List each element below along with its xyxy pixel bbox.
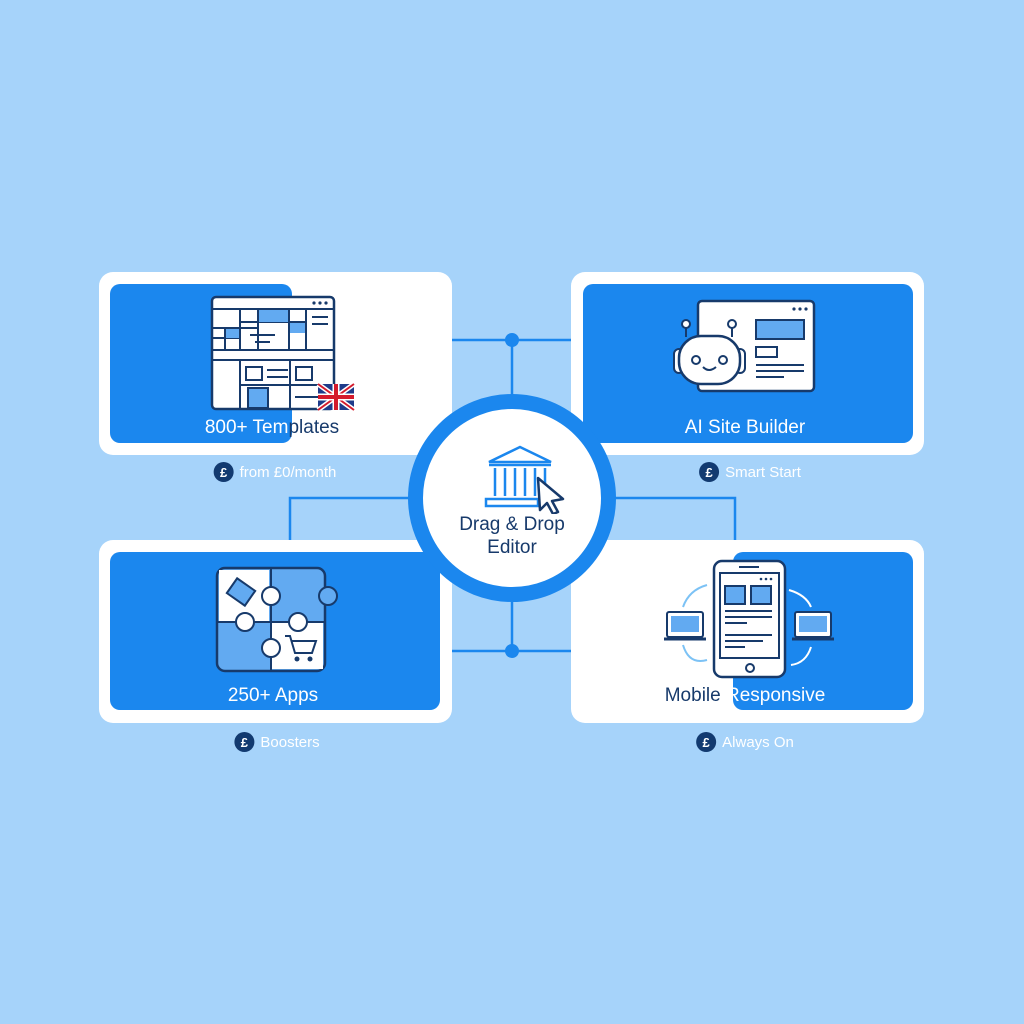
caption: Always On xyxy=(696,732,794,752)
label: 250+ Apps xyxy=(228,685,318,706)
label: Drag & Drop xyxy=(459,514,565,535)
caption: Smart Start: Smart Start xyxy=(725,464,801,480)
label: Editor xyxy=(487,537,537,558)
caption: Boosters xyxy=(234,732,320,752)
icon: building with cursor xyxy=(484,446,564,514)
caption: Boosters: Boosters xyxy=(260,734,320,750)
caption: Always On: £ xyxy=(703,734,710,750)
caption: Always On: Always On xyxy=(722,734,794,750)
icon: template layout xyxy=(210,296,354,411)
panel: 250+ Apps xyxy=(99,540,452,723)
caption: Boosters: £ xyxy=(241,734,248,750)
caption: from £0/month: from £0/month xyxy=(240,464,336,480)
label: 800+ Templates xyxy=(205,417,339,438)
label: AI Site Builder xyxy=(685,417,805,438)
caption: Smart Start xyxy=(699,462,801,482)
label xyxy=(459,514,565,558)
icon: UK flag xyxy=(318,384,354,410)
caption: Smart Start: £ xyxy=(705,464,713,480)
panel: AI Site Builder xyxy=(571,272,924,455)
panel: Mobile Responsive xyxy=(571,540,924,723)
icon: puzzle xyxy=(216,566,338,672)
icon: phone with devices xyxy=(664,560,834,678)
caption: from £0/month: £ xyxy=(220,464,227,480)
panel: 800+ Templates xyxy=(99,272,452,455)
center circle: Drag & Drop Editor xyxy=(408,394,616,602)
icon: robot and browser xyxy=(673,300,816,392)
caption: from £0/month xyxy=(214,462,336,482)
label: Mobile Responsive xyxy=(665,685,825,706)
